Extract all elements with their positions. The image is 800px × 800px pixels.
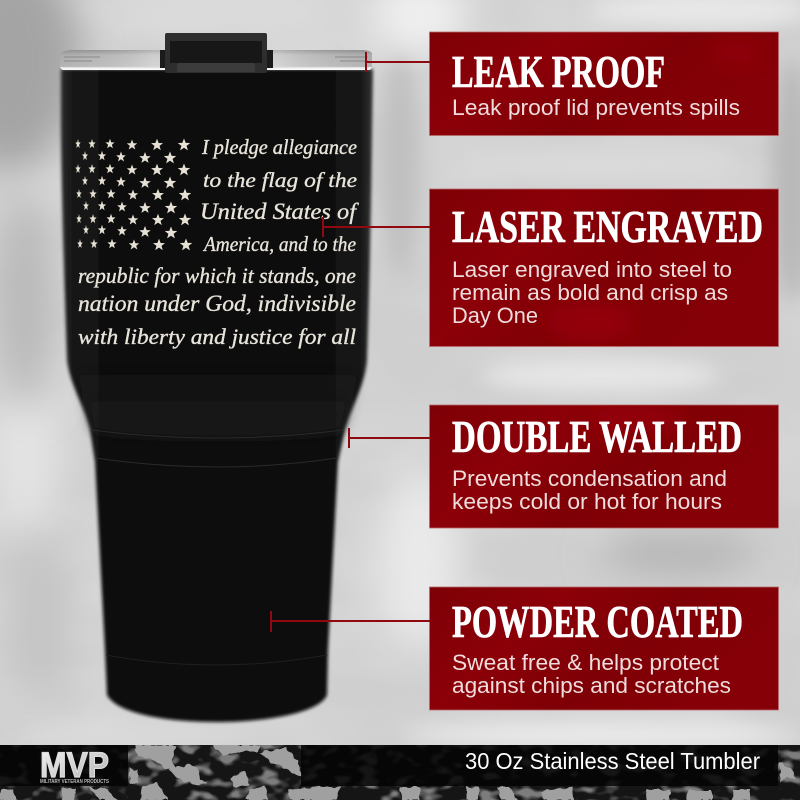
engraved flag stars — [75, 138, 192, 250]
footer black band: right — [301, 745, 778, 786]
engraved pledge text: to the flag of the — [203, 168, 357, 192]
description: leak proof: Leak proof lid prevents spills — [452, 95, 740, 120]
engraved pledge text — [78, 135, 360, 349]
engraved pledge text: United States of — [200, 199, 360, 224]
logo: MVP: MILITARY VETERAN PRODUCTS — [40, 779, 110, 785]
tumbler body — [61, 69, 373, 722]
footer black band: left — [0, 745, 128, 786]
description: powder coated: against chips and scratches — [452, 673, 731, 698]
panel: double walled — [430, 405, 778, 528]
description: laser engraved: remain as bold and crisp as — [452, 280, 728, 305]
description: powder coated: Sweat free & helps protect — [452, 650, 719, 675]
clear lid — [60, 50, 372, 70]
tumbler — [60, 33, 373, 722]
engraved pledge text: republic for which it stands, one — [78, 263, 356, 288]
body shoulder sheen — [76, 362, 359, 436]
leader line: leak proof — [366, 52, 430, 72]
panel: laser engraved — [430, 189, 778, 346]
footer camo strip — [0, 745, 800, 800]
footer product name: 30 Oz Stainless Steel Tumbler — [465, 748, 760, 774]
description: laser engraved: Laser engraved into steel to — [452, 257, 732, 282]
engraved pledge text: I pledge allegiance — [201, 135, 357, 159]
description: laser engraved — [452, 257, 732, 328]
body groove lines — [92, 430, 343, 665]
engraved pledge text: America, and to the — [202, 232, 356, 256]
leader line: powder coated — [271, 611, 430, 632]
heading: leak proof: LEAK PROOF — [452, 47, 665, 97]
description: double walled: keeps cold or hot for hours — [452, 489, 722, 514]
description: powder coated — [452, 650, 731, 698]
description: double walled: Prevents condensation and — [452, 466, 727, 491]
logo: MVP: MVP — [40, 746, 109, 785]
description: double walled — [452, 466, 727, 514]
description: laser engraved: Day One — [452, 303, 538, 328]
panel: powder coated — [430, 587, 778, 710]
panel: leak proof — [430, 32, 778, 136]
lid slider tab — [160, 33, 273, 73]
engraved pledge text: with liberty and justice for all — [78, 324, 356, 349]
leader line: laser engraved — [323, 217, 430, 237]
leader line: double walled — [349, 428, 430, 448]
engraved pledge text: nation under God, indivisible — [78, 291, 356, 316]
